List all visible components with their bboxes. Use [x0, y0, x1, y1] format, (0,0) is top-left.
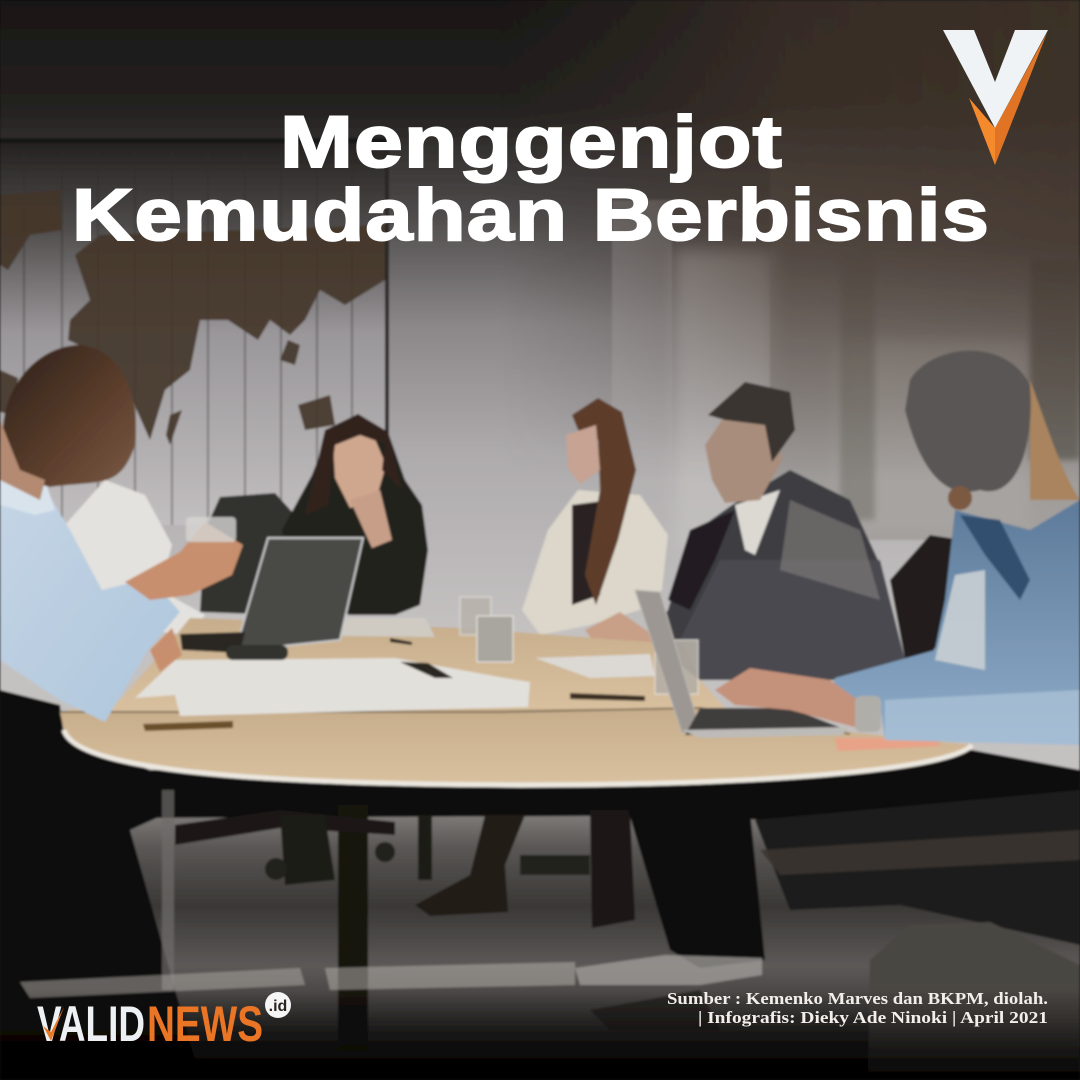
photo bottom shade: [0, 990, 1080, 1080]
source credit: [667, 989, 1048, 1027]
person: woman in dark blouse: [200, 414, 428, 615]
person: woman in white blazer: [522, 398, 668, 635]
logo: V mark: [943, 30, 1048, 165]
world map wall panel: [0, 138, 389, 525]
title: Kemudahan Berbisnis: [72, 175, 990, 256]
water glasses: [460, 597, 698, 694]
laptop: right: [635, 590, 940, 751]
title: Menggenjot: [280, 102, 783, 183]
title: [72, 102, 990, 256]
person: foreground woman in blue shirt, right: [715, 351, 1080, 745]
paper sheet on table: [135, 658, 530, 716]
table: [60, 618, 972, 785]
person: man in white shirt, back: [65, 480, 205, 635]
logo: ValidNews.id: [37, 992, 291, 1052]
source credit: | Infografis: Dieky Ade Ninoki | April 2021: [698, 1008, 1048, 1027]
pens and notes on table: [143, 618, 655, 731]
person: man in dark jacket: [585, 382, 962, 680]
source credit: Sumber : Kemenko Marves dan BKPM, diolah.: [667, 989, 1048, 1008]
logo: ValidNews.id: NEWS: [147, 996, 263, 1052]
logo: ValidNews.id: VALID: [37, 996, 145, 1052]
background: meeting room wall: [0, 0, 1080, 772]
logo: ValidNews.id: .id: [269, 998, 287, 1015]
laptop: left: [180, 538, 363, 660]
under table and floor: [0, 690, 1080, 1080]
person: foreground woman in blue shirt, left: [0, 472, 243, 722]
head: foreground woman left: [0, 345, 136, 500]
